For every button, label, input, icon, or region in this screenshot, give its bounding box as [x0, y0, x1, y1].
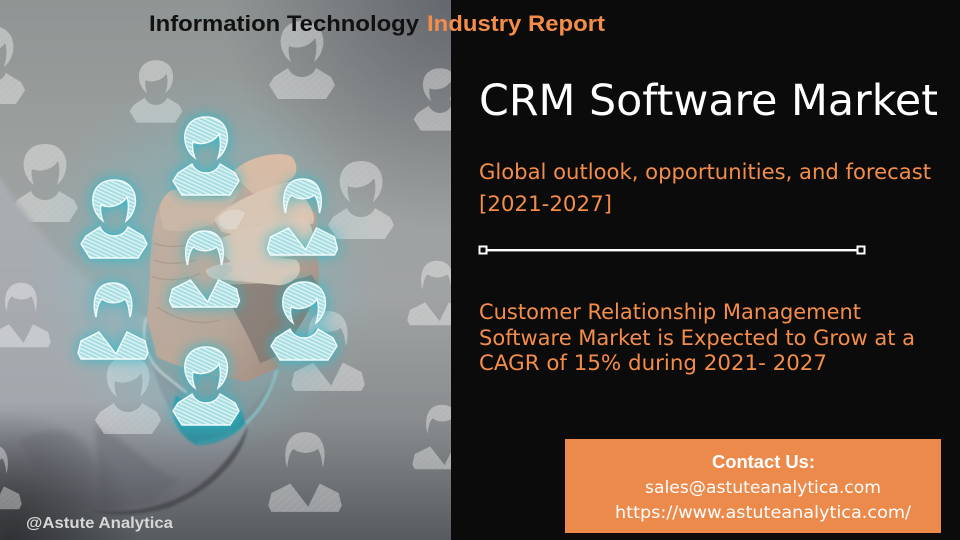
title: CRM Software Market: [479, 76, 938, 126]
glowing person: bottom: [173, 347, 239, 425]
vignette: dark lower-left corner: [0, 400, 150, 540]
text block: CAGR statement: [479, 300, 915, 375]
teal glow haze: [30, 75, 380, 455]
contact email: sales@astuteanalytica.com: [645, 478, 881, 498]
ghost icon: lower left partial: [0, 445, 22, 509]
contact website: https://www.astuteanalytica.com/: [615, 503, 911, 523]
panel: contact box: [565, 439, 941, 533]
shirt cuff: [144, 318, 277, 445]
text block: CAGR statement: CAGR of 15% during 2021- 2027: [479, 351, 827, 375]
sleeve: shirt arm: [0, 165, 250, 511]
panel: right dark background: [451, 0, 960, 540]
people icons: glowing: [78, 117, 338, 425]
glowing person: centre: [170, 231, 240, 307]
subtitle: Global outlook, opportunities, and forecast: [479, 160, 931, 184]
teal haze over hand: [55, 120, 355, 460]
heading: report category: Industry Report: [427, 11, 606, 36]
subtitle: [479, 160, 931, 216]
glowing person: right upper: [268, 179, 338, 255]
contact heading: Contact Us:: [712, 452, 815, 472]
glowing person: left upper: [81, 180, 147, 258]
photo panel: left background: [0, 0, 472, 540]
subtitle: [2021-2027]: [479, 192, 612, 216]
ghost icons: faded people in background: [0, 21, 472, 512]
divider line with square ends: [480, 246, 864, 254]
glowing person: right lower: [271, 282, 337, 360]
glowing person: top: [173, 117, 239, 195]
text block: CAGR statement: Customer Relationship Management: [479, 300, 861, 324]
hand holding pen: [147, 154, 319, 382]
brand credit: @Astute Analytica: [26, 515, 173, 532]
heading: report category: Information Technology: [149, 11, 420, 36]
ghost icon: left mid: [0, 283, 51, 347]
glowing person: left lower: [78, 283, 148, 359]
shadow under sleeve: [93, 425, 248, 514]
text block: CAGR statement: Software Market is Expected to Grow at a: [479, 326, 915, 350]
ghost icon: over sleeve: [95, 356, 161, 434]
